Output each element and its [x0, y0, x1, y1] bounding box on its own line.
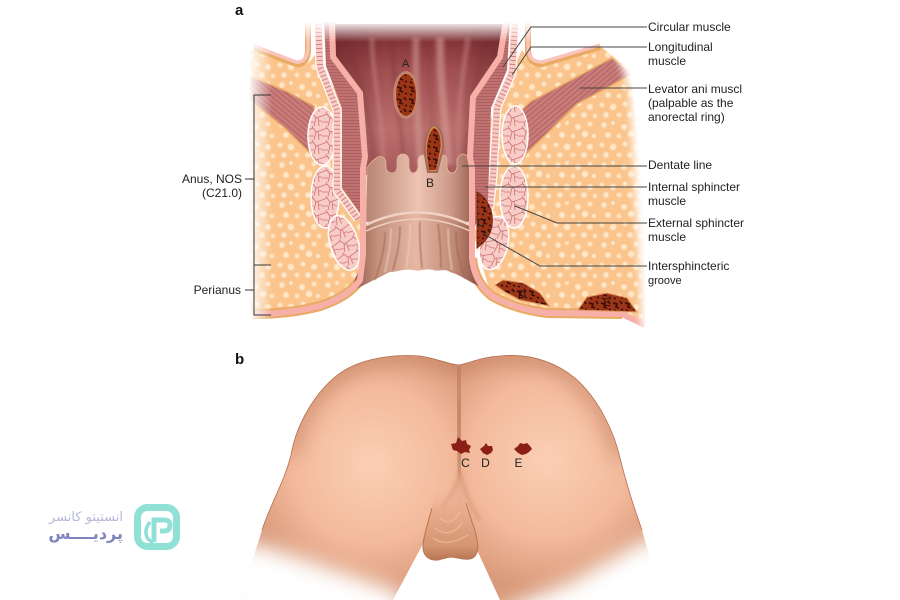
- upper left skin fold: [254, 20, 308, 64]
- right edge fade: [612, 40, 660, 335]
- right external sphincter lobes: [475, 106, 528, 272]
- right internal sphincter: [470, 20, 510, 232]
- panel b: external view of the perianal region: [253, 355, 649, 600]
- lesion letters in section: D: [518, 289, 526, 301]
- tumour C: [477, 192, 492, 248]
- tumour E: [578, 293, 637, 312]
- lesion letters: E: [514, 456, 523, 470]
- lesion letters in section: A: [402, 58, 410, 70]
- label: Circular muscle: Circular muscle: [648, 20, 731, 34]
- lesion letters in section: C: [477, 218, 485, 229]
- lesion D: [480, 443, 493, 455]
- logo text line 1: انستیتو کانسر: [48, 510, 123, 525]
- left mucosal wall and perianal skin: [252, 20, 365, 314]
- lesion letters in section: E: [603, 297, 611, 309]
- label: Internal sphincter muscle: muscle: [648, 194, 686, 208]
- logo text line 2: پردیــــس: [48, 524, 123, 544]
- panel letter a: a: [235, 2, 244, 19]
- lesion C: [451, 437, 471, 454]
- infographic: anal canal anatomy: [48, 7, 744, 600]
- logo: Pardis Cancer Institute: [48, 508, 176, 546]
- panel letter b: b: [235, 351, 244, 368]
- label: Internal sphincter muscle: Internal sphincter: [648, 180, 740, 194]
- label: Anus, NOS: (C21.0): [202, 186, 242, 200]
- scrotum: [423, 490, 478, 560]
- label: Longitudinal muscle: Longitudinal: [648, 40, 713, 54]
- right ischioanal fat: [472, 46, 645, 322]
- label: Levator ani muscle: anorectal ring): [648, 110, 725, 124]
- anal canal lower folds: [350, 212, 482, 292]
- rectum interior with mucosal folds: [333, 24, 505, 175]
- left longitudinal muscle: [318, 20, 358, 219]
- label: Levator ani muscle: (palpable as the: [648, 96, 734, 110]
- label: Levator ani muscle: Levator ani muscl: [648, 82, 742, 96]
- top fade of the section: [240, 10, 540, 42]
- lesion E: [514, 443, 532, 455]
- label: Anus, NOS: Anus, NOS: [182, 172, 242, 186]
- left edge fade: [248, 40, 272, 330]
- left ischioanal fat: [250, 50, 362, 316]
- lesion letters: [461, 456, 523, 470]
- body silhouette: [253, 356, 649, 600]
- label: Longitudinal muscle: muscle: [648, 54, 686, 68]
- lesion letters in section: B: [426, 176, 434, 190]
- label: Intersphincteric groove: Intersphincteric: [648, 259, 729, 273]
- leader lines: [462, 27, 647, 266]
- tumour B: [425, 125, 443, 172]
- bracket: anus and perianus ranges: [245, 95, 271, 315]
- lesion letters: D: [481, 456, 490, 470]
- logo mark: [138, 508, 176, 546]
- left levator ani muscle: [250, 76, 318, 165]
- lesion letters in section: [402, 58, 611, 309]
- body outline: [262, 355, 642, 530]
- label: External sphincter muscle: muscle: [648, 230, 686, 244]
- label: Perianus: Perianus: [194, 283, 241, 297]
- label: Dentate line: Dentate line: [648, 158, 712, 172]
- right levator ani muscle: [522, 58, 632, 160]
- label: External sphincter muscle: External sphincter: [648, 216, 744, 230]
- left external sphincter lobes: [308, 107, 365, 274]
- tumour D: [495, 280, 549, 306]
- skin fat edges: [252, 258, 622, 314]
- panel a: cross-section of the anal canal: [240, 10, 660, 335]
- bottom fade left: [225, 545, 410, 600]
- left internal sphincter: [324, 20, 364, 216]
- bottom fade right: [495, 530, 690, 600]
- tumour A: [393, 71, 419, 119]
- right mucosal wall and perianal skin: [470, 20, 645, 325]
- right longitudinal muscle: [484, 20, 515, 225]
- anal canal upper with dentate line: [366, 154, 470, 222]
- label: Intersphincteric groove: groove: [648, 275, 682, 287]
- lesion letters: C: [461, 456, 470, 470]
- upper right skin fold: [528, 20, 600, 64]
